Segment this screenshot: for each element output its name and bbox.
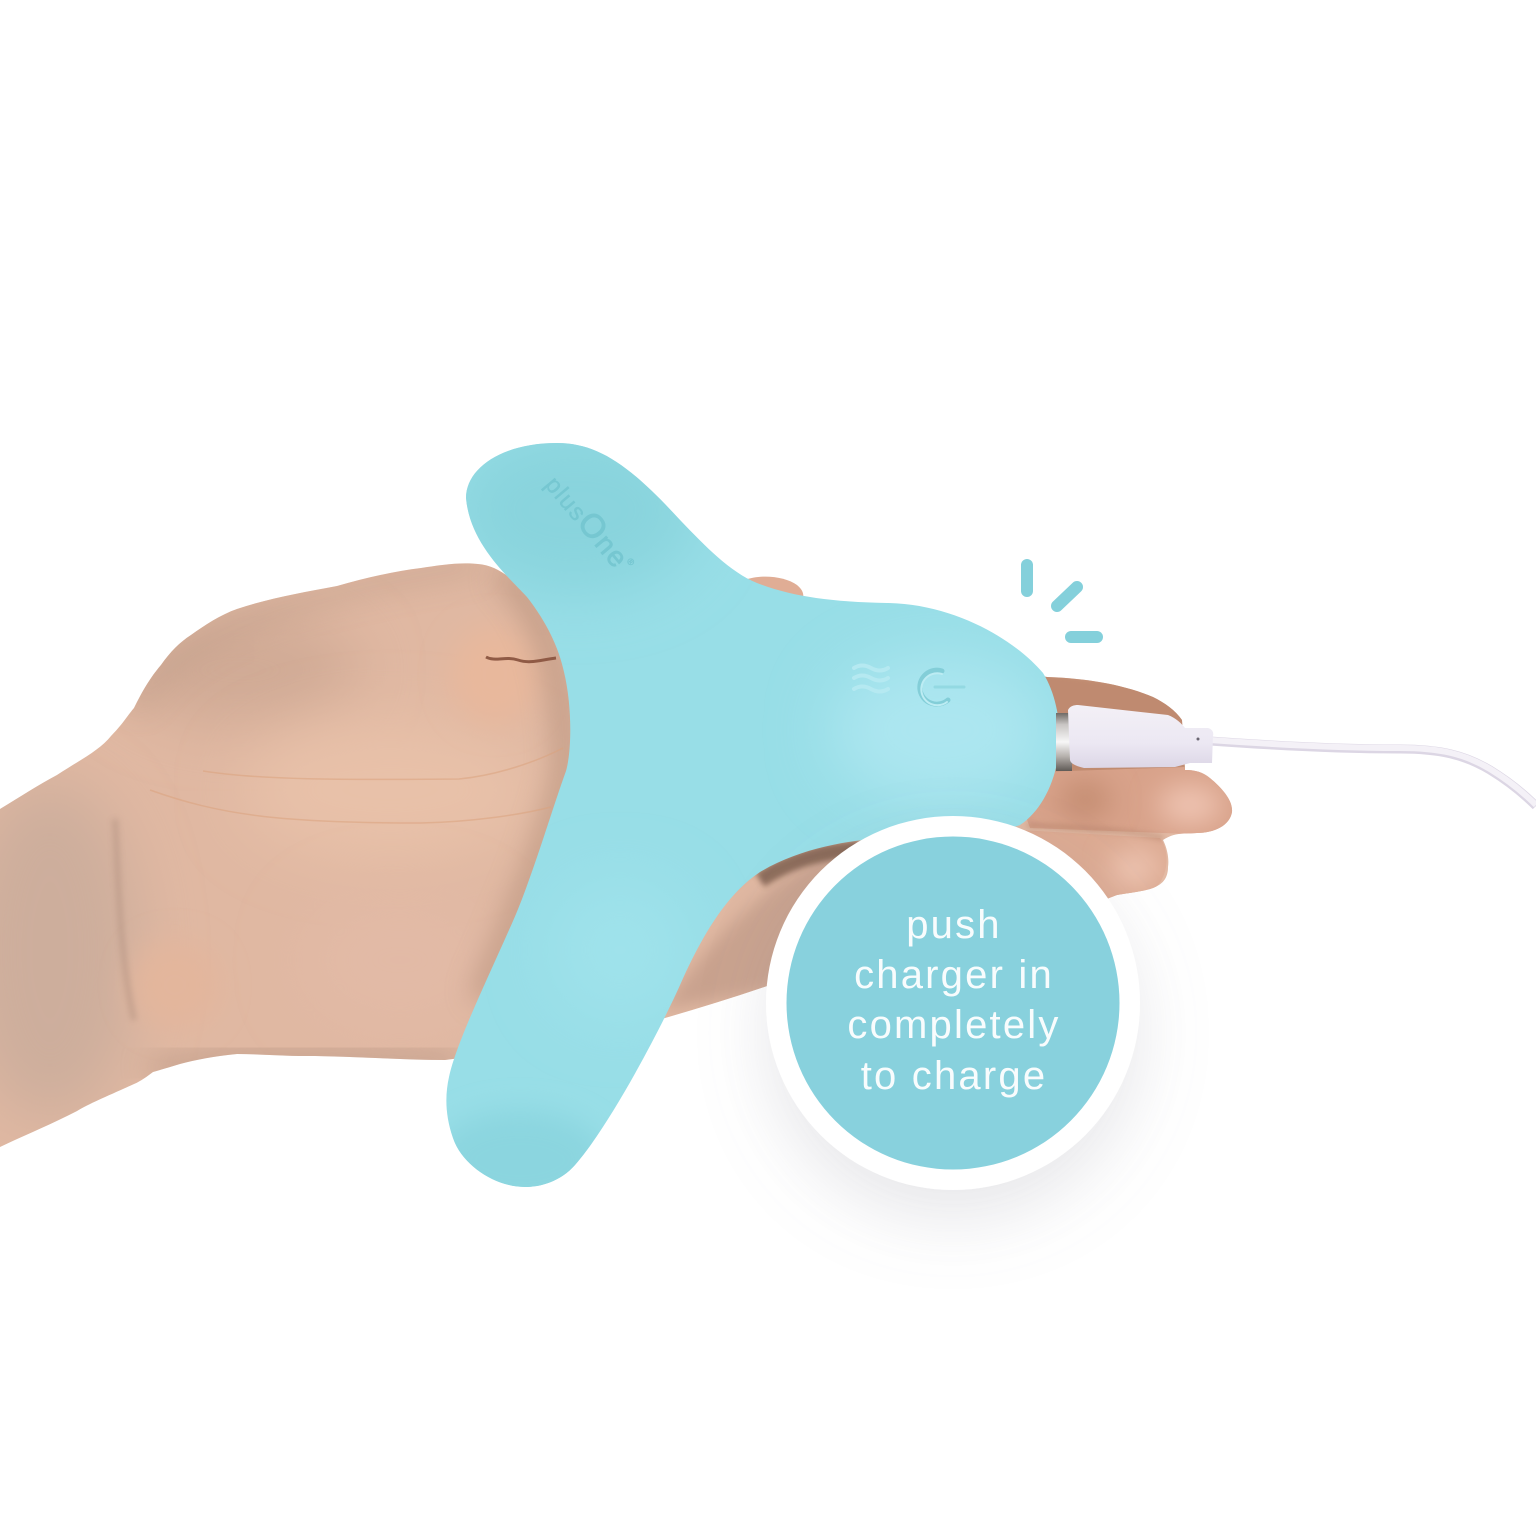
under-device hand tone [670,858,835,1010]
finger crease [1027,825,1163,838]
wrist tone [0,780,140,1120]
highlight right [830,655,1050,805]
embossed logo: ® [625,556,638,569]
charger cable [1056,705,1536,806]
callout text: push [906,903,1002,947]
hand [0,540,1250,1160]
embossed heat icon [854,666,888,692]
callout text: to charge [861,1054,1047,1098]
top arm tone [466,443,704,591]
product photo illustration [0,443,1536,1231]
callout text: completely [847,1003,1061,1047]
device [435,425,1070,1210]
metal pin [1056,713,1072,771]
callout text [847,903,1061,1098]
palm lines [203,748,563,779]
lower arm tip tone [449,1116,599,1187]
thumb crease [486,657,556,662]
edge shadows [480,570,566,1000]
embossed logo: plusOne [539,472,635,574]
highlight lower arm [675,971,686,996]
finger: upper [1045,676,1191,772]
fingertip behind device [745,577,803,600]
embossed power icon [920,670,964,705]
finger: lower [1026,830,1166,898]
plug body [1068,705,1213,768]
callout: charging instruction [766,816,1140,1190]
icon: click burst lines [1027,565,1097,637]
wrist crease [115,819,134,1020]
callout text: charger in [854,953,1054,997]
